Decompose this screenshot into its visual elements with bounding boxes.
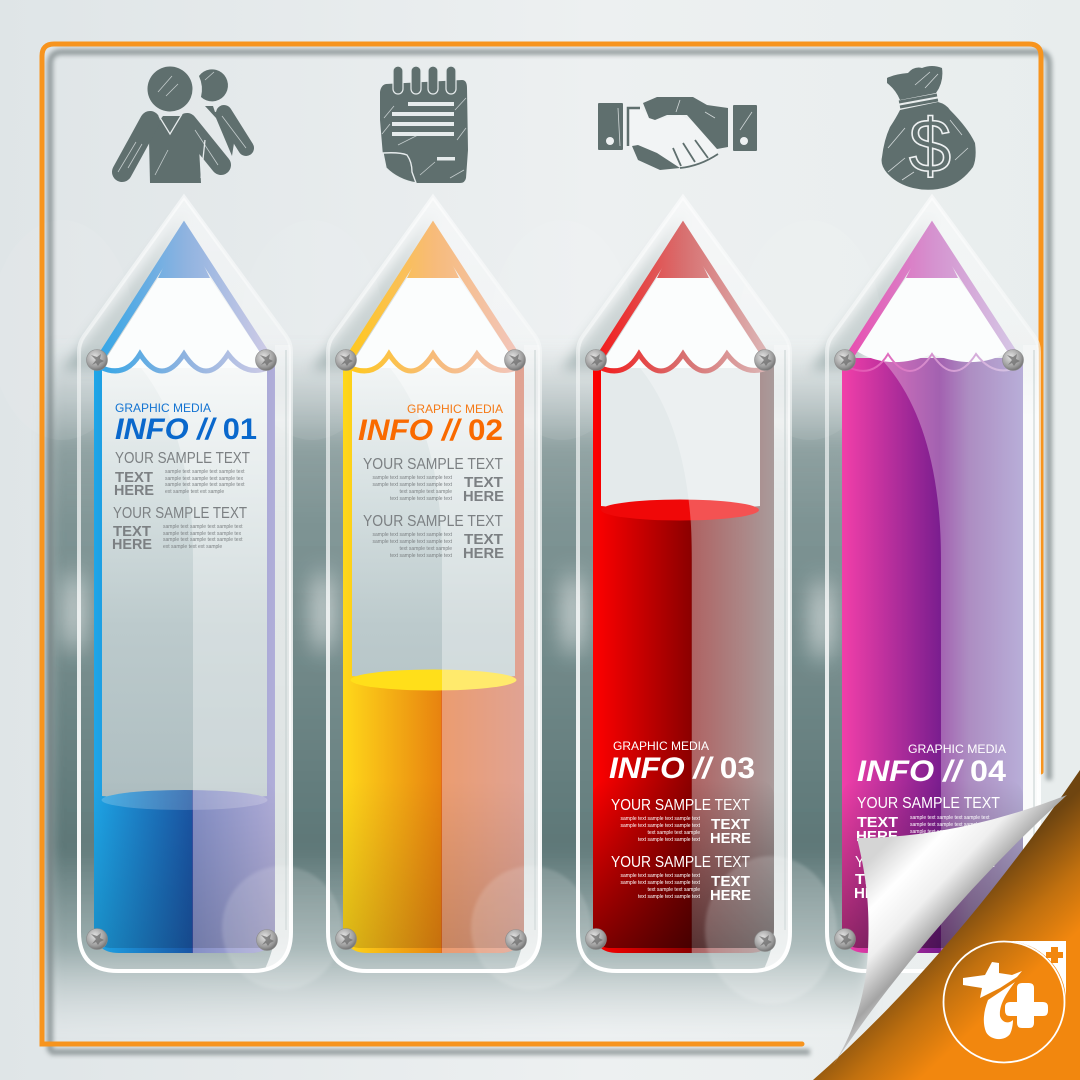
icon: notepad [380,66,468,183]
background shadows behind pencils [0,215,932,1030]
pencil 2 text: text sample text sample [399,489,452,495]
pencil tip [158,225,210,278]
scalloped edge [100,354,270,371]
pencil 3 text: text sample text sample text [638,894,701,900]
pencil 2 text: sample text sample text sample text [373,482,453,488]
pencil 1 text: HERE [114,482,154,499]
pencil 3 text: sample text sample text sample text [621,816,701,822]
pencil 1: blue [77,194,342,986]
pencil 4 text: TEXT [857,814,898,831]
orange corner [813,770,1080,1080]
pencil 1 text: ext sample text ext sample [163,544,222,550]
pencil 4 text: sample text sample text sample text [910,822,990,828]
pencil 3 text: text sample text sample [647,830,700,836]
glass edge [1033,350,1035,930]
pencil body [94,366,275,953]
text block one: YOUR SAMPLE TEXT [611,797,750,814]
pencil 1 text: sample text sample text sample text [165,482,245,488]
dollar sign: $ [909,104,951,189]
text block two: YOUR SAMPLE TEXT [113,505,247,522]
pencil 2: yellow [326,194,591,984]
heading: GRAPHIC MEDIA [613,739,709,753]
pencil 3 text: text sample text sample text [638,837,701,843]
text block one: YOUR SAMPLE TEXT [363,456,503,473]
icon: money bag [882,66,976,190]
pencil 4 text: sample text sample text sample text [910,815,990,821]
heading: GRAPHIC MEDIA [407,402,503,416]
glass case [827,197,1039,971]
pencil body [842,358,1023,953]
glass right margin [764,356,790,968]
pencil 4 text: TEXT [855,871,896,888]
page curl [833,795,1067,1065]
logo plus [1005,983,1048,1028]
pencil 1 text: sample text sample text sample text [163,524,243,530]
glass edge [285,350,287,930]
glass right margin [266,354,291,968]
pencil 1 text: ext sample text ext sample [165,489,224,495]
text block one: YOUR SAMPLE TEXT [115,450,250,467]
heading: GRAPHIC MEDIA [115,401,211,415]
glass right margin [1023,348,1039,849]
icon: business people [118,66,246,183]
logo letter t [963,962,1022,1039]
scalloped edge [599,354,769,371]
pencil 4: magenta [825,194,1041,973]
text block two: YOUR SAMPLE TEXT [855,854,998,871]
pencil 2 text: text sample text sample text [390,496,453,502]
pencil 2 text: sample text sample text sample text [373,475,453,481]
pencil tip [906,225,958,278]
pencil 2 text [358,402,504,562]
pencil 2 text: HERE [463,545,504,562]
scalloped edge [349,354,519,371]
logo badge [944,942,1064,1062]
pencil 3 text [609,739,755,904]
pencil 2 text: INFO // 02 [358,414,503,447]
pencil 3 text: HERE [710,887,751,904]
pencil 2 text: text sample text sample text [390,553,453,559]
pencil body [343,366,524,953]
pencil 3: red [576,194,838,993]
pencil 3 text: HERE [710,830,751,847]
pencil 4 text: HERE [856,828,898,845]
pencil 4 text: sample text sample text sample text [910,829,990,835]
pencil 2 text: sample text sample text sample text [373,539,453,545]
heading: GRAPHIC MEDIA [908,742,1006,756]
pencil 1 text: sample text sample text sample text [165,469,245,475]
glass case [328,197,540,971]
glass edge [534,350,536,930]
pencil 4 text: ext sample text ext sample [910,836,969,842]
text block two: YOUR SAMPLE TEXT [363,513,503,530]
pencil 2 text: HERE [463,488,504,505]
pencil 2 text: TEXT [464,531,503,548]
glass case [79,197,291,971]
pencil 3 text: sample text sample text sample text [621,823,701,829]
pencil 2 text: text sample text sample [399,546,452,552]
pencil 1 text: TEXT [115,469,153,486]
pencil 1 text: INFO // 01 [115,413,257,446]
pencil 3 text: sample text sample text sample text [621,880,701,886]
pencil 3 text: INFO // 03 [609,752,755,785]
pencil 2 text: sample text sample text sample text [373,532,453,538]
text block two: YOUR SAMPLE TEXT [611,854,750,871]
pencil 3 text: TEXT [711,816,750,833]
pencil 1 text [112,401,257,553]
logo [944,941,1066,1062]
pencil tip [657,225,709,278]
pencil 1 text: sample text sample text sample text [163,537,243,543]
pencil 4 text [854,742,1006,902]
text block one: YOUR SAMPLE TEXT [857,795,1000,812]
pencil body [593,366,774,953]
pencil 4 text: INFO // 04 [857,755,1006,788]
screws [86,350,1024,952]
glass right margin [514,356,540,968]
pencil 4 text: HERE [854,885,896,902]
glass case [578,197,790,971]
pencil 3 text: sample text sample text sample text [621,873,701,879]
pencil 3 text: text sample text sample [647,887,700,893]
pencil tip [407,225,459,278]
icon: handshake [598,97,757,170]
scalloped edge [848,354,1018,371]
pencil 1 text: sample text sample text sample tex [163,531,242,537]
pencil 3 text: TEXT [711,873,750,890]
glass edge [784,350,786,930]
pencil 1 text: TEXT [113,523,151,540]
pencil 1 text: HERE [112,536,152,553]
pencil 2 text: TEXT [464,474,503,491]
pencil 1 text: sample text sample text sample tex [165,476,244,482]
